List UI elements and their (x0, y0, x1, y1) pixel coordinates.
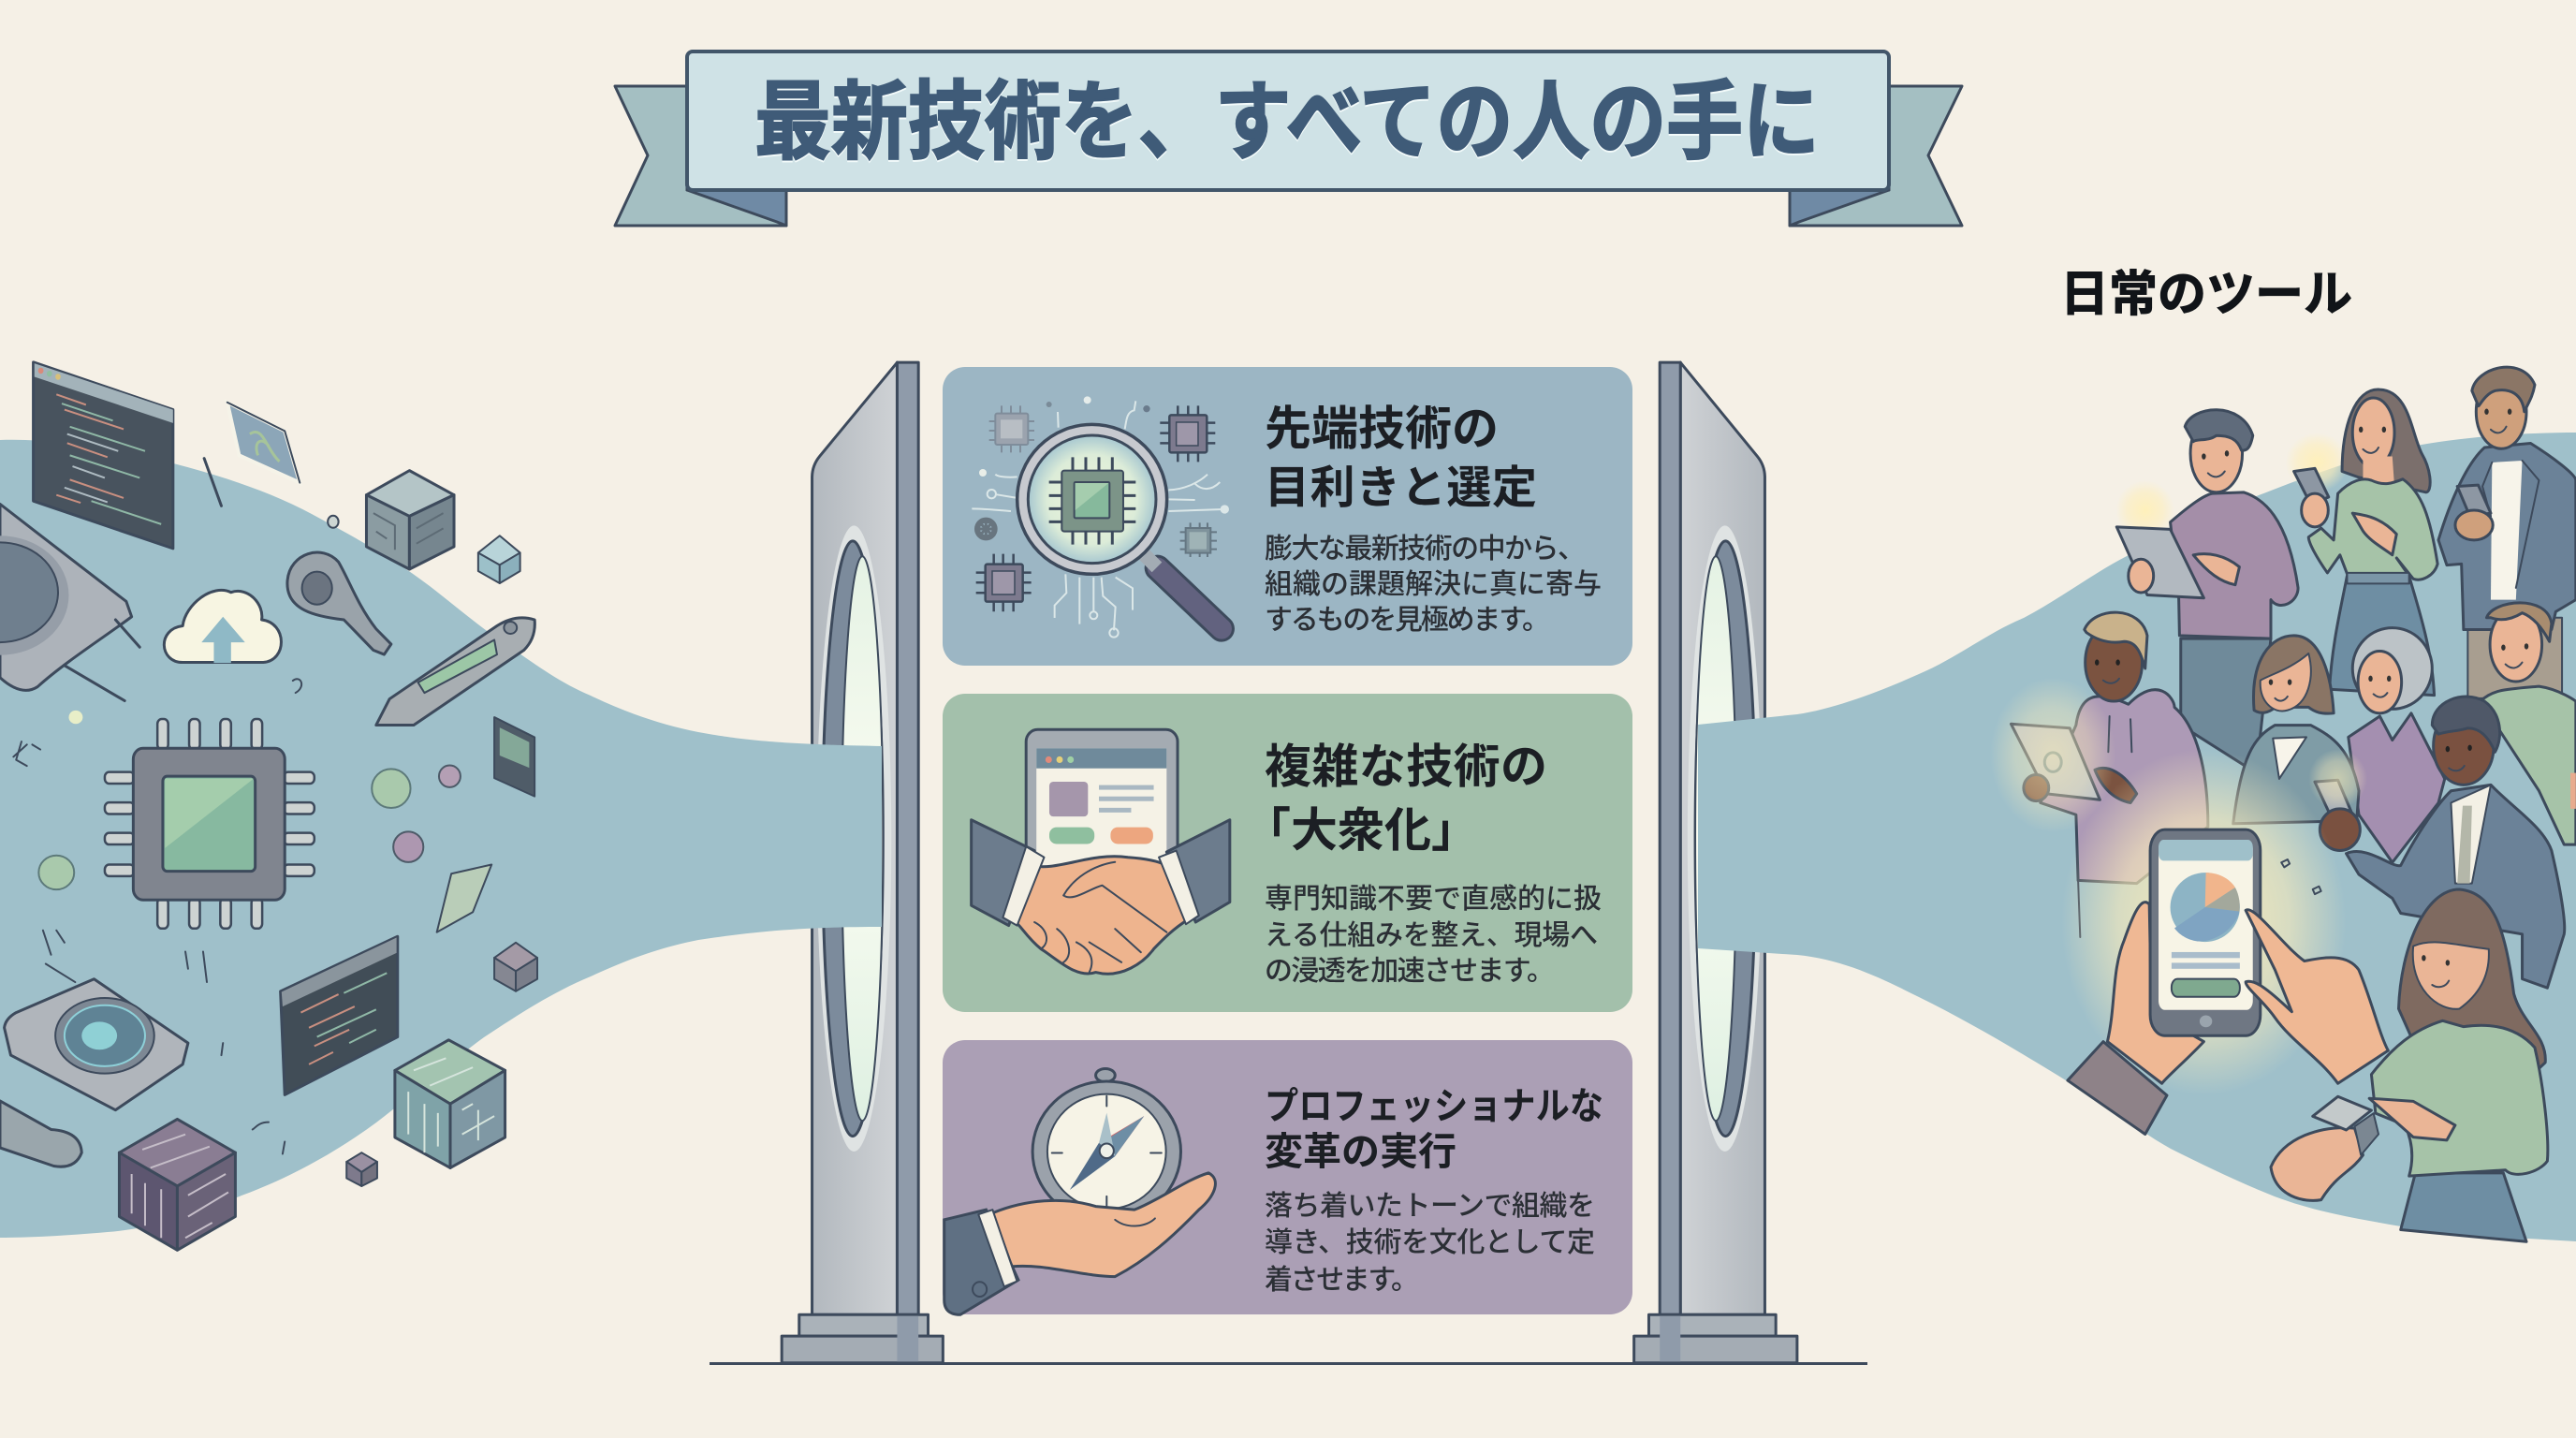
icon: data cube (366, 471, 454, 569)
hand holding phone: left hand and sleeve (2068, 902, 2203, 1134)
heading: 複雑な技術の (1265, 741, 1547, 793)
icon: tiny cube (346, 1152, 377, 1186)
gate: left and right pillars (782, 362, 1797, 1363)
phone with pie chart (2150, 829, 2261, 1035)
person: man in purple sweater with tablet (2116, 410, 2298, 773)
body text (1265, 534, 1602, 636)
flow stream: left, complex technology (0, 440, 882, 1238)
heading line 2: 変革の実行 (1265, 1130, 1456, 1173)
person: man in purple hoodie with tablet (2011, 612, 2208, 937)
title text: 最新技術を、すべての人の手に (754, 75, 1820, 170)
body text: 落ち着いたトーンで組織を (1265, 1191, 1595, 1222)
icon: small teal cube (478, 536, 520, 583)
icon: purple circuit cube (119, 1119, 235, 1250)
hand tapping phone (2246, 910, 2388, 1083)
person: woman with bob haircut (2233, 636, 2359, 824)
sparkles (2281, 859, 2321, 894)
title banner (615, 51, 1962, 226)
icon: central processor chip (105, 719, 315, 929)
floating dots (13, 679, 461, 1153)
icon: hard disk, lower (5, 964, 188, 1110)
heading: プロフェッショナルな (1265, 1086, 1603, 1127)
heading: 先端技術の (1265, 403, 1499, 455)
heading line 2: 「大衆化」 (1244, 804, 1478, 857)
glow around devices (1990, 678, 2367, 1095)
body text: 膨大な最新技術の中から、 (1265, 534, 1586, 565)
icon: kite shard (437, 864, 491, 932)
icon: code window (34, 362, 173, 549)
person: woman in green top (2294, 389, 2437, 696)
panel: professional transformation (943, 1040, 1632, 1314)
icon: wrench tool (287, 552, 391, 654)
flow stream: right, everyday use (1698, 433, 2576, 1241)
person: woman with smartwatch (2271, 889, 2548, 1241)
body text: 着させます。 (1265, 1265, 1419, 1296)
ground line (710, 1362, 1867, 1365)
person: man in green t-shirt (2481, 603, 2576, 844)
icon: tablet with handshake (972, 729, 1230, 974)
person: man in blazer, back right (2438, 367, 2576, 698)
body text: 導き、技術を文化として定 (1265, 1227, 1595, 1258)
floating technology icons (0, 362, 537, 1250)
icon: magnifier over chip (972, 396, 1229, 638)
icon: small grey cube (494, 943, 537, 991)
label: everyday tools: 日常のツール (2060, 268, 2352, 322)
person: older woman with grey hair (2349, 628, 2445, 862)
icon: pen drive (376, 618, 534, 726)
panel: technology selection (943, 367, 1632, 666)
person: man in suit with phone (2315, 697, 2565, 988)
body text: の浸透を加速させます。 (1265, 956, 1555, 987)
people using everyday technology (1990, 367, 2576, 1241)
icon: compass in hand (944, 1068, 1215, 1314)
body text: 組織の課題解決に真に寄与 (1265, 569, 1602, 600)
body text (1265, 884, 1602, 987)
icon: cloud upload (164, 590, 281, 663)
icon: small display card (494, 717, 534, 797)
body text: するものを見極めます。 (1265, 605, 1550, 636)
icon: probe tool (0, 1101, 81, 1167)
heading line 2: 目利きと選定 (1265, 463, 1537, 513)
icon: diamond card (204, 403, 339, 528)
icon: code window, lower (281, 936, 398, 1094)
panel: democratizing technology (943, 694, 1632, 1012)
glow behind upper people (2115, 433, 2349, 540)
small chips (976, 405, 1217, 611)
body text: える仕組みを整え、現場へ (1265, 920, 1598, 951)
icon: green circuit cube (395, 1040, 505, 1167)
body text (1265, 1191, 1595, 1296)
icon: hard disk, large (0, 504, 139, 701)
body text: 専門知識不要で直感的に扱 (1265, 884, 1602, 915)
